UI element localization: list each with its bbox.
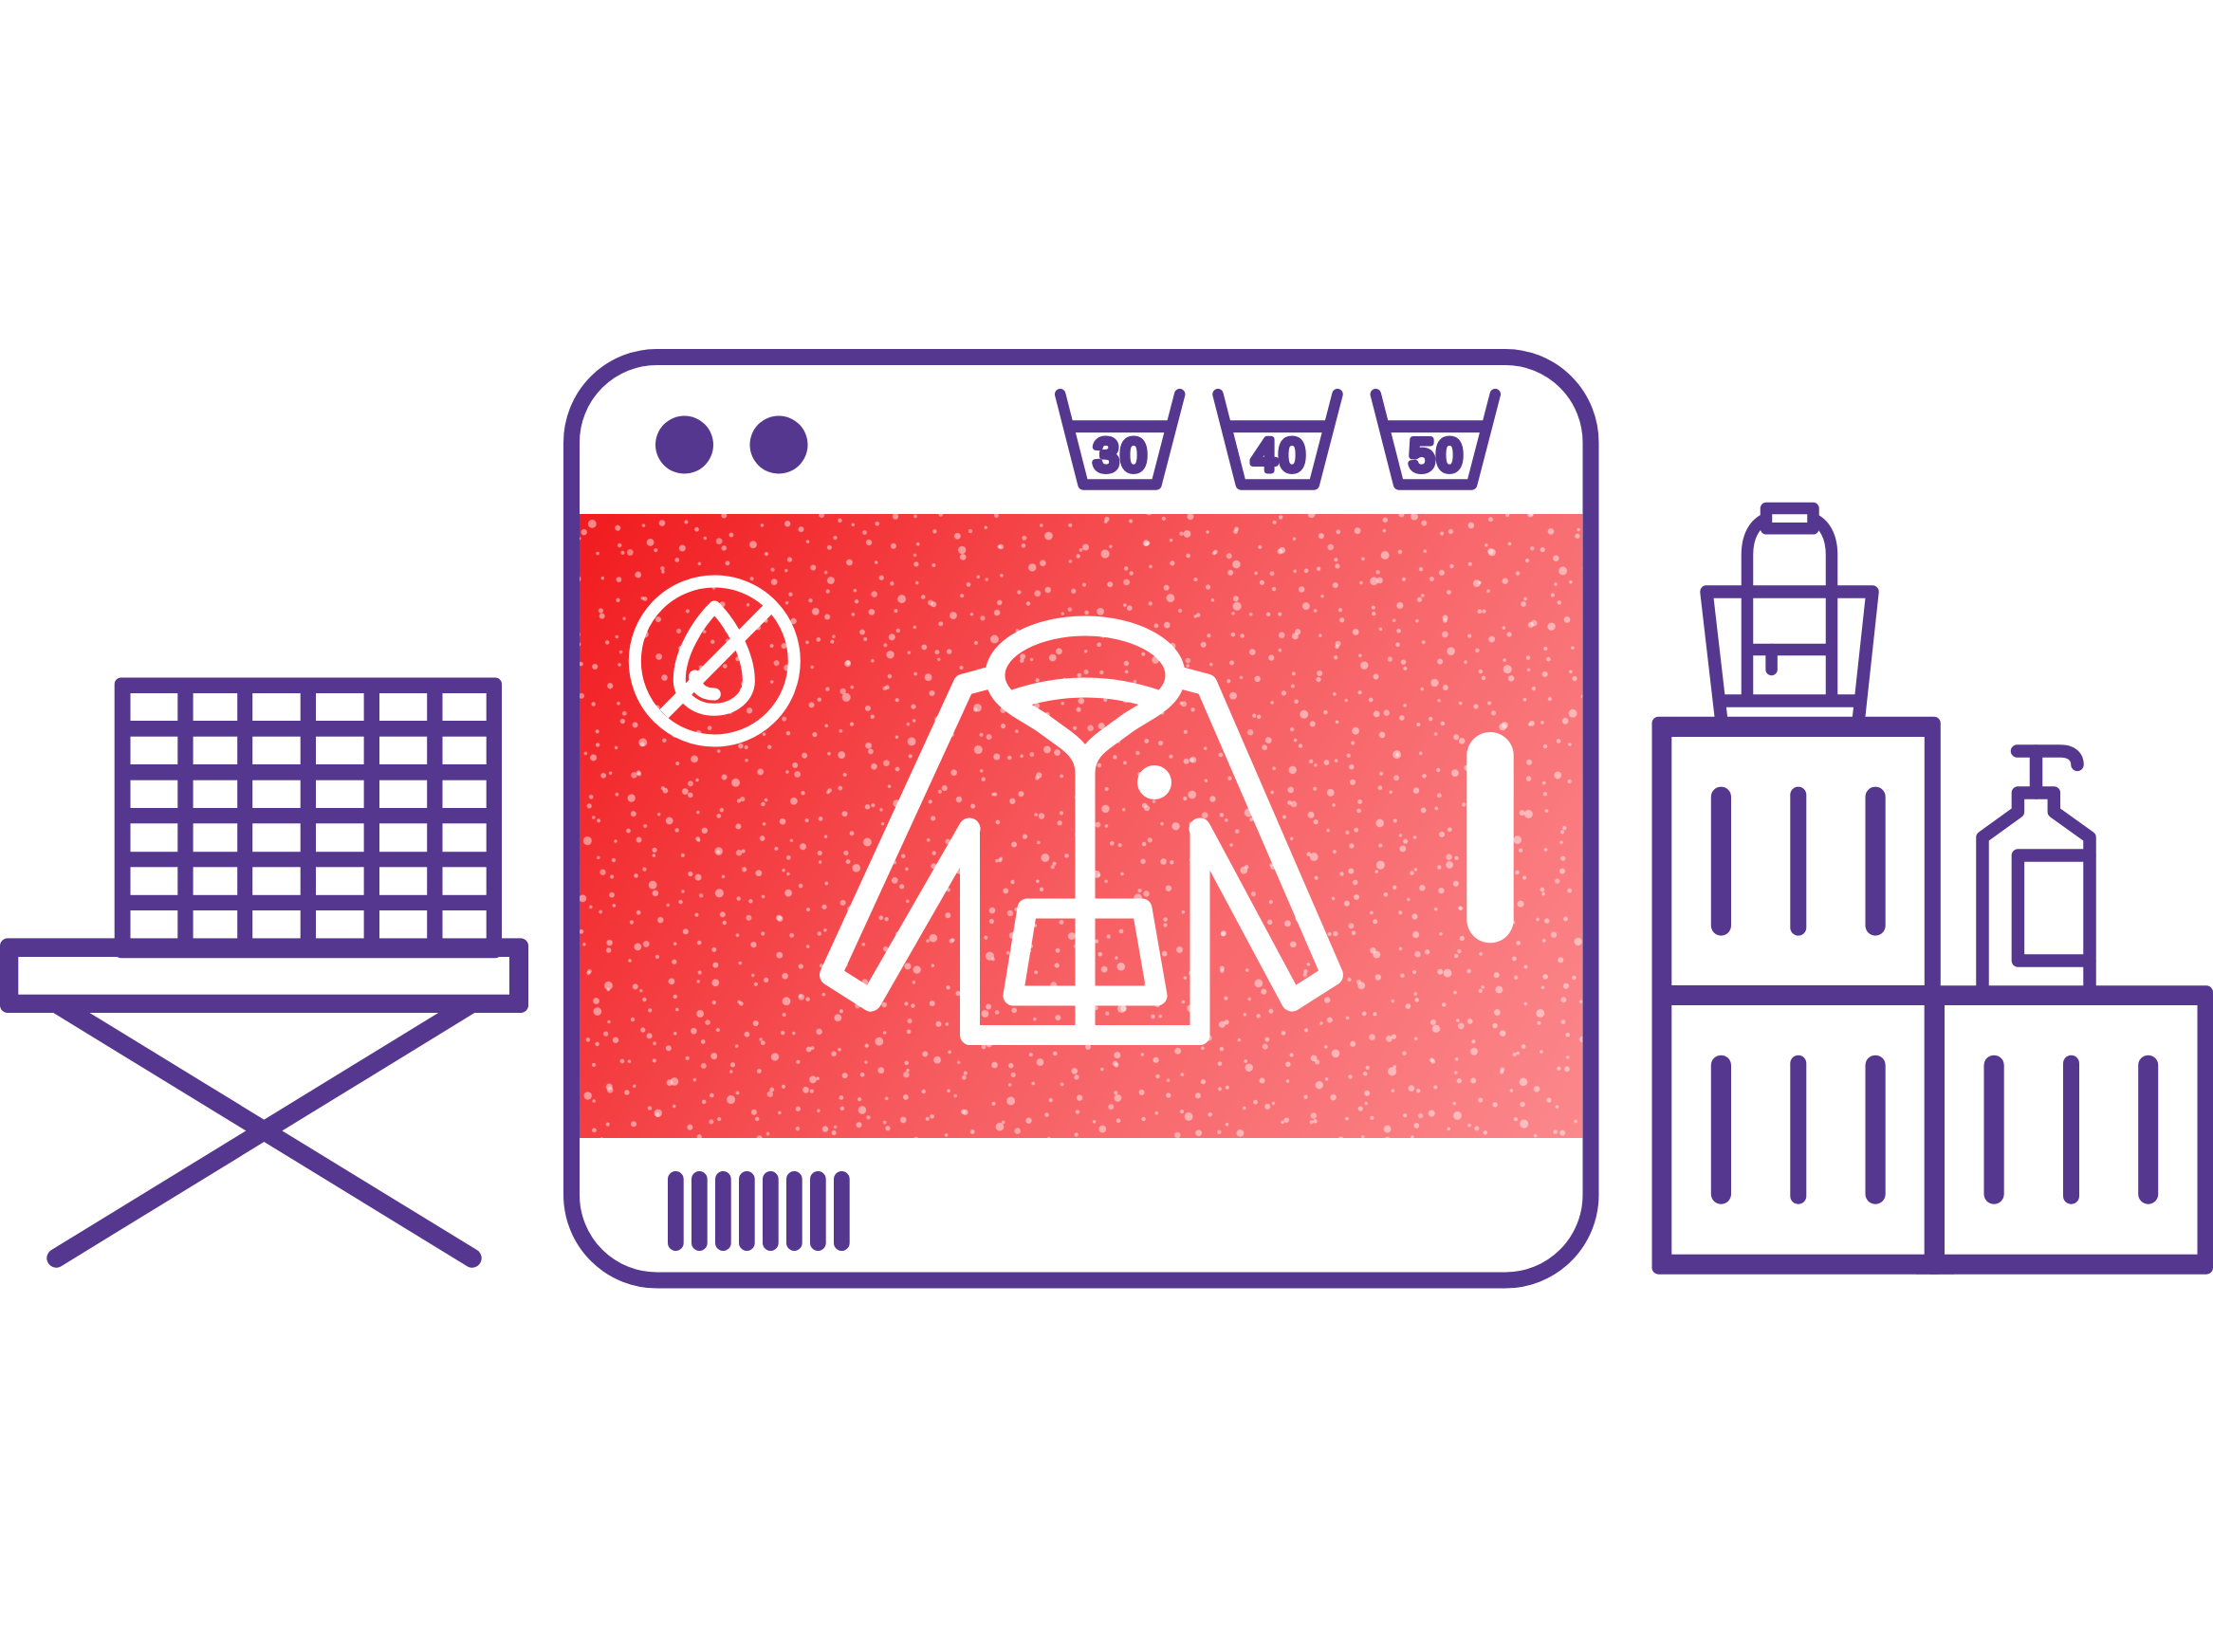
icon: wash basin 30: 30 — [1094, 430, 1149, 480]
pump bottle — [1982, 751, 2090, 985]
window body — [571, 357, 1591, 1280]
red gradient band — [580, 514, 1582, 1138]
icon: wash basin 40: 40 — [1252, 430, 1307, 480]
icon: wash basin 40 — [1218, 395, 1337, 485]
icon: jacket — [831, 626, 1332, 1036]
crate: top — [1652, 717, 1941, 1005]
jacket body — [969, 829, 1200, 1036]
crate: bottom left — [1652, 985, 1954, 1275]
door handle — [1466, 732, 1514, 943]
vent slots — [668, 1171, 850, 1251]
table crossed legs — [56, 1005, 472, 1258]
table top — [0, 938, 528, 1013]
jacket zip — [1076, 770, 1095, 1036]
speckle texture — [580, 514, 1582, 1138]
detergent bottle in box — [1747, 508, 1832, 697]
detergent box — [1706, 592, 1872, 723]
icon: wash basin 50 — [1375, 395, 1495, 485]
icon: drying rack with grid on X-legged table — [0, 677, 528, 1258]
icon: wash basin 30 — [1060, 395, 1180, 485]
jacket sleeves and shoulders — [831, 677, 1332, 1000]
jacket collar — [995, 626, 1175, 773]
drying grid — [115, 677, 502, 958]
crate: bottom right — [1925, 985, 2213, 1275]
icon: no water drop — [635, 581, 794, 741]
jacket button — [1137, 765, 1171, 799]
collar neck band — [1013, 688, 1157, 700]
icon: detergent box and bottle on crates — [1652, 508, 2213, 1275]
control dots — [655, 415, 808, 474]
panel: washing machine window — [571, 357, 1591, 1280]
jacket pocket — [1013, 909, 1157, 996]
icon: wash basin 50: 50 — [1410, 430, 1465, 480]
